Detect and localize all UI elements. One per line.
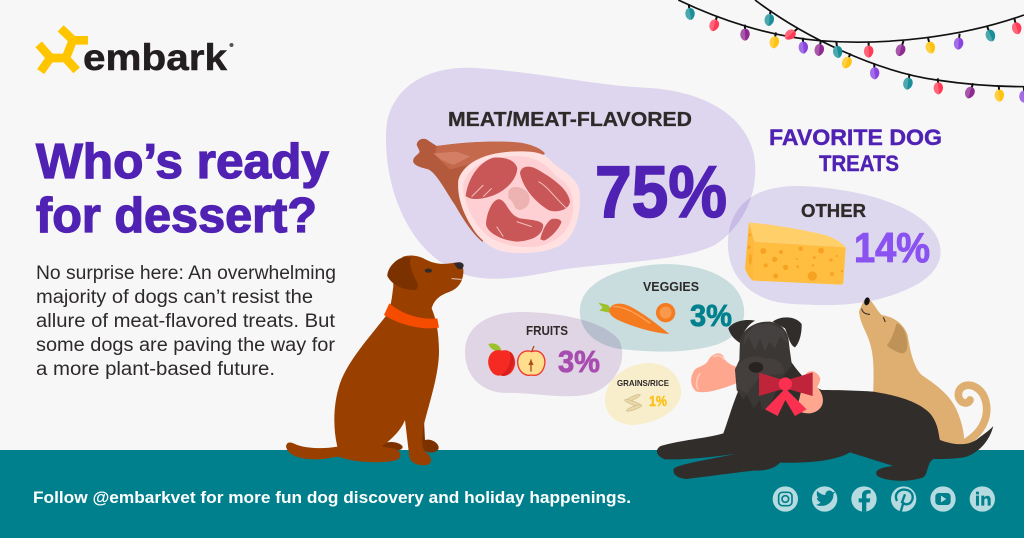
head — [735, 322, 792, 410]
bone — [691, 353, 823, 413]
collar — [384, 303, 439, 328]
bubble: fruits — [465, 312, 622, 396]
heading: favorite dog treats: TREATS — [819, 151, 899, 176]
ears — [728, 320, 755, 343]
bubble: other — [728, 186, 941, 305]
far paw — [421, 407, 439, 453]
body paragraph: some dogs are paving the way for — [36, 335, 336, 356]
body paragraph — [36, 263, 336, 380]
icon: apples — [488, 343, 545, 376]
title: for dessert? — [36, 189, 317, 243]
body — [657, 360, 993, 481]
icon: facebook — [851, 486, 877, 512]
heading: favorite dog treats — [769, 125, 942, 176]
social icons — [773, 486, 995, 512]
icon: instagram — [773, 486, 798, 512]
value: grains 1%: 1% — [649, 393, 667, 410]
heading: favorite dog treats: FAVORITE DOG — [769, 125, 942, 150]
icon: linkedin — [970, 486, 995, 512]
footer text: Follow @embarkvet for more fun dog discovery and holiday happenings. — [33, 489, 631, 507]
body — [859, 298, 964, 445]
muzzle — [735, 356, 784, 393]
value: 75%: 75% — [595, 152, 727, 233]
label: fruits: FRUITS — [526, 323, 568, 338]
tail — [958, 385, 987, 443]
value: 14%: 14% — [854, 224, 930, 271]
ear — [887, 323, 907, 353]
icon: ham — [413, 139, 580, 253]
nose — [454, 262, 464, 269]
yellow dog — [859, 297, 987, 445]
logo icon — [39, 28, 88, 72]
label: other: OTHER — [801, 201, 866, 221]
registered mark — [230, 43, 234, 47]
icon: twitter — [812, 486, 837, 512]
footer band — [0, 450, 1024, 538]
label: veggies: VEGGIES — [643, 279, 699, 294]
icon: carrot — [598, 303, 675, 334]
logo wordmark: embark — [83, 37, 227, 78]
value: fruits 3%: 3% — [558, 344, 600, 379]
holiday string lights — [678, 0, 1024, 103]
brown dog — [286, 255, 464, 465]
title: Who’s ready — [36, 135, 329, 189]
body paragraph: a more plant-based future. — [36, 359, 275, 380]
label: grains/rice: GRAINS/RICE — [617, 378, 669, 388]
nose — [749, 362, 763, 373]
body — [286, 255, 463, 465]
icon: grains — [624, 393, 642, 412]
body paragraph: No surprise here: An overwhelming — [36, 263, 336, 284]
fringe — [743, 323, 788, 352]
label: meat: MEAT/MEAT-FLAVORED — [448, 109, 692, 131]
body paragraph: majority of dogs can’t resist the — [36, 287, 313, 308]
title — [36, 135, 329, 243]
logo: embark — [39, 28, 234, 78]
bubble: grains — [605, 363, 681, 425]
bubble: meat — [386, 68, 755, 279]
icon: youtube — [930, 486, 956, 512]
black dog — [657, 317, 993, 481]
bow — [759, 372, 813, 416]
bubble: veggies — [580, 264, 744, 352]
body paragraph: allure of meat-flavored treats. But — [36, 311, 336, 332]
icon: cheese — [745, 222, 846, 285]
icon: pinterest — [891, 486, 916, 512]
ear — [387, 257, 418, 290]
eye — [425, 269, 432, 273]
nose and mouth — [863, 297, 871, 306]
value: veggies 3%: 3% — [690, 298, 732, 333]
